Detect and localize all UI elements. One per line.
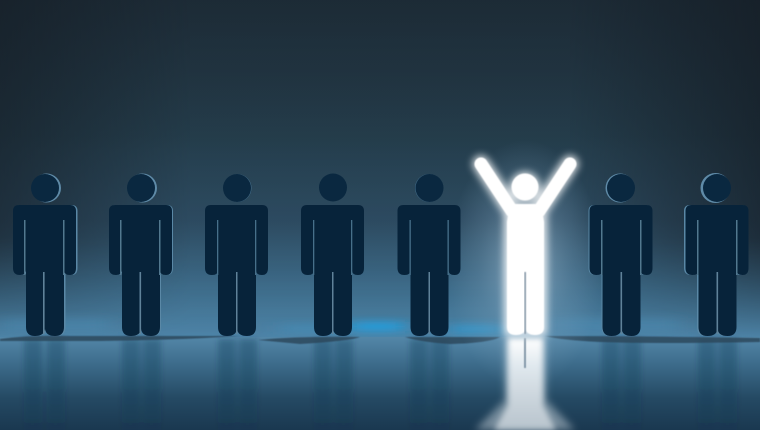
person 1 [13, 174, 78, 336]
glowing white person [481, 164, 570, 336]
glow [481, 164, 570, 336]
floor shadows at the horizon [0, 336, 760, 344]
reflection of the glowing figure [475, 338, 575, 430]
figure [481, 164, 570, 335]
person 8 [684, 173, 748, 336]
person 4 [301, 174, 364, 336]
background wall [0, 0, 760, 340]
blue horizon glow [0, 318, 680, 333]
leg gap [524, 272, 526, 334]
floor reflections of the dark figures [24, 339, 737, 430]
person 5 [398, 174, 460, 336]
person 7 [588, 174, 652, 336]
halo around the glowing figure [447, 140, 603, 390]
person 3 [205, 174, 268, 336]
floor [0, 337, 760, 430]
person 2 [109, 174, 173, 336]
